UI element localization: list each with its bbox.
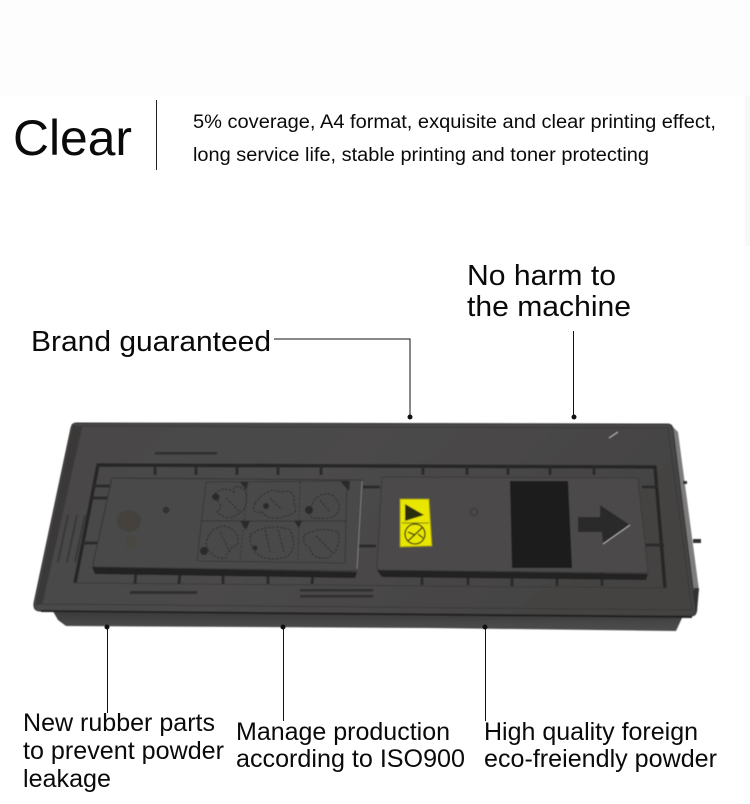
- callout: brand guaranteed: [31, 326, 412, 420]
- header divider: [156, 100, 157, 170]
- warning label: [400, 499, 432, 547]
- callout: manage production: Manage production: [236, 718, 450, 746]
- left plate smudge: [117, 510, 141, 532]
- callout: no harm to the machine: [467, 260, 631, 420]
- description text: long service life, stable printing and toner protecting: [193, 145, 649, 166]
- cartridge side wall: [50, 600, 695, 631]
- recess frame: [75, 465, 665, 588]
- heading: Clear: Clear: [13, 110, 132, 166]
- callout: high quality powder: High quality foreign: [484, 718, 698, 746]
- callout: new rubber parts: to prevent powder: [23, 737, 224, 765]
- toner cartridge: [34, 423, 701, 631]
- callout: new rubber parts: leakage: [23, 765, 111, 793]
- callout: brand guaranteed: Brand guaranteed: [31, 326, 271, 358]
- callout: high quality powder: eco-freiendly powder: [484, 745, 717, 773]
- right plate: [377, 477, 648, 573]
- raised bars: [130, 452, 373, 598]
- description text: [193, 112, 716, 166]
- right plate shadow: [377, 570, 648, 580]
- recess ribs: [82, 466, 664, 586]
- callout: new rubber parts: [23, 624, 224, 793]
- black panel: [510, 481, 572, 568]
- left bevel: [35, 425, 82, 606]
- right edge strip: [672, 426, 699, 614]
- callout: manage production: [236, 624, 465, 773]
- left edge grooves: [58, 515, 85, 562]
- arrow: [578, 505, 630, 544]
- side clips: [693, 588, 699, 614]
- callout: new rubber parts: New rubber parts: [23, 709, 215, 737]
- cartridge top face: [34, 423, 696, 616]
- left plate shadow: [92, 567, 357, 578]
- callout: no harm to the machine: the machine: [467, 291, 631, 323]
- description text: 5% coverage, A4 format, exquisite and clear printing effect,: [193, 112, 716, 133]
- scratch: [609, 432, 618, 438]
- callout: manage production: according to ISO900: [236, 745, 465, 773]
- embossed instruction panel: [197, 481, 347, 563]
- callout: high quality powder: [482, 624, 717, 773]
- callout: no harm to the machine: No harm to: [467, 260, 616, 292]
- left plate: [93, 478, 362, 571]
